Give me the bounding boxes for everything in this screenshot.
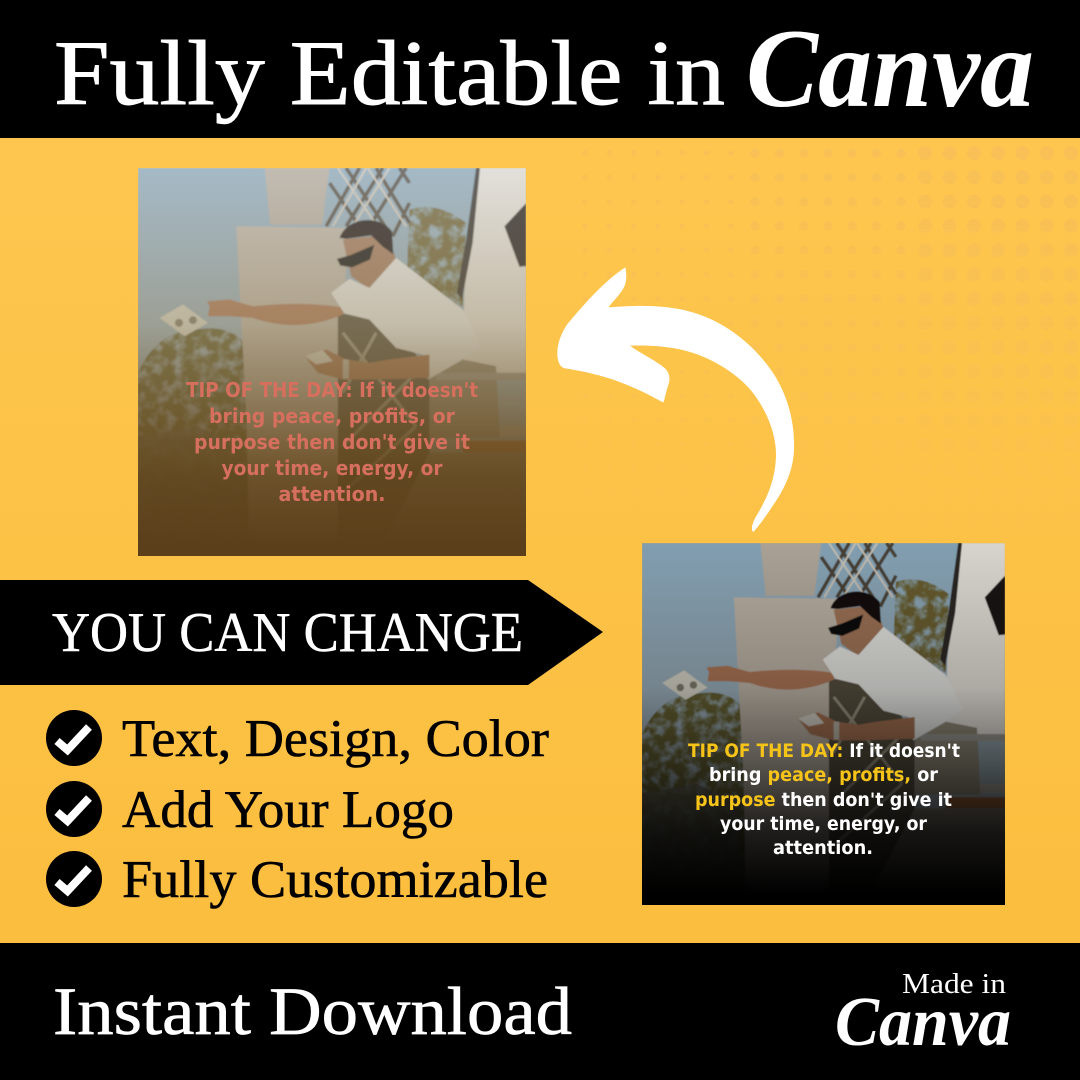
made in label: Made in <box>902 968 1007 1000</box>
heading: Fully Editable in: Fully Editable in <box>54 22 725 124</box>
faded tip text: purpose then don't give it <box>194 430 470 454</box>
banner: you can change <box>0 580 603 685</box>
banner: you can change: YOU CAN CHANGE <box>52 602 523 664</box>
header band <box>0 0 1080 138</box>
faded tip text: TIP OF THE DAY: If it doesn't <box>186 378 478 402</box>
instant download: Instant Download <box>53 973 572 1049</box>
tip text: attention. <box>773 837 873 859</box>
arrow: curved white arrow <box>557 267 794 532</box>
faded tip text: your time, energy, or <box>222 456 443 480</box>
footer band <box>0 943 1080 1080</box>
canva logo: Canva <box>835 984 1011 1061</box>
item: fully customizable: Fully Customizable <box>122 851 548 909</box>
heading: Canva wordmark: Canva <box>746 7 1034 131</box>
tip text: TIP OF THE DAY: If it doesn't <box>688 740 960 762</box>
tip text: purpose then don't give it <box>695 789 952 811</box>
halftone dot pattern <box>573 141 1080 561</box>
faded tip text: attention. <box>278 482 386 506</box>
faded tip text <box>186 378 478 506</box>
item: add your logo: Add Your Logo <box>122 781 454 839</box>
tip text: bring peace, profits, or <box>709 764 939 786</box>
item: text, design, color: Text, Design, Color <box>122 710 549 768</box>
tip text <box>688 740 960 859</box>
checklist <box>46 710 549 909</box>
faded design preview <box>138 168 526 556</box>
faded tip text: bring peace, profits, or <box>209 404 455 428</box>
edited design preview <box>642 543 1005 905</box>
tip text: your time, energy, or <box>720 813 928 835</box>
